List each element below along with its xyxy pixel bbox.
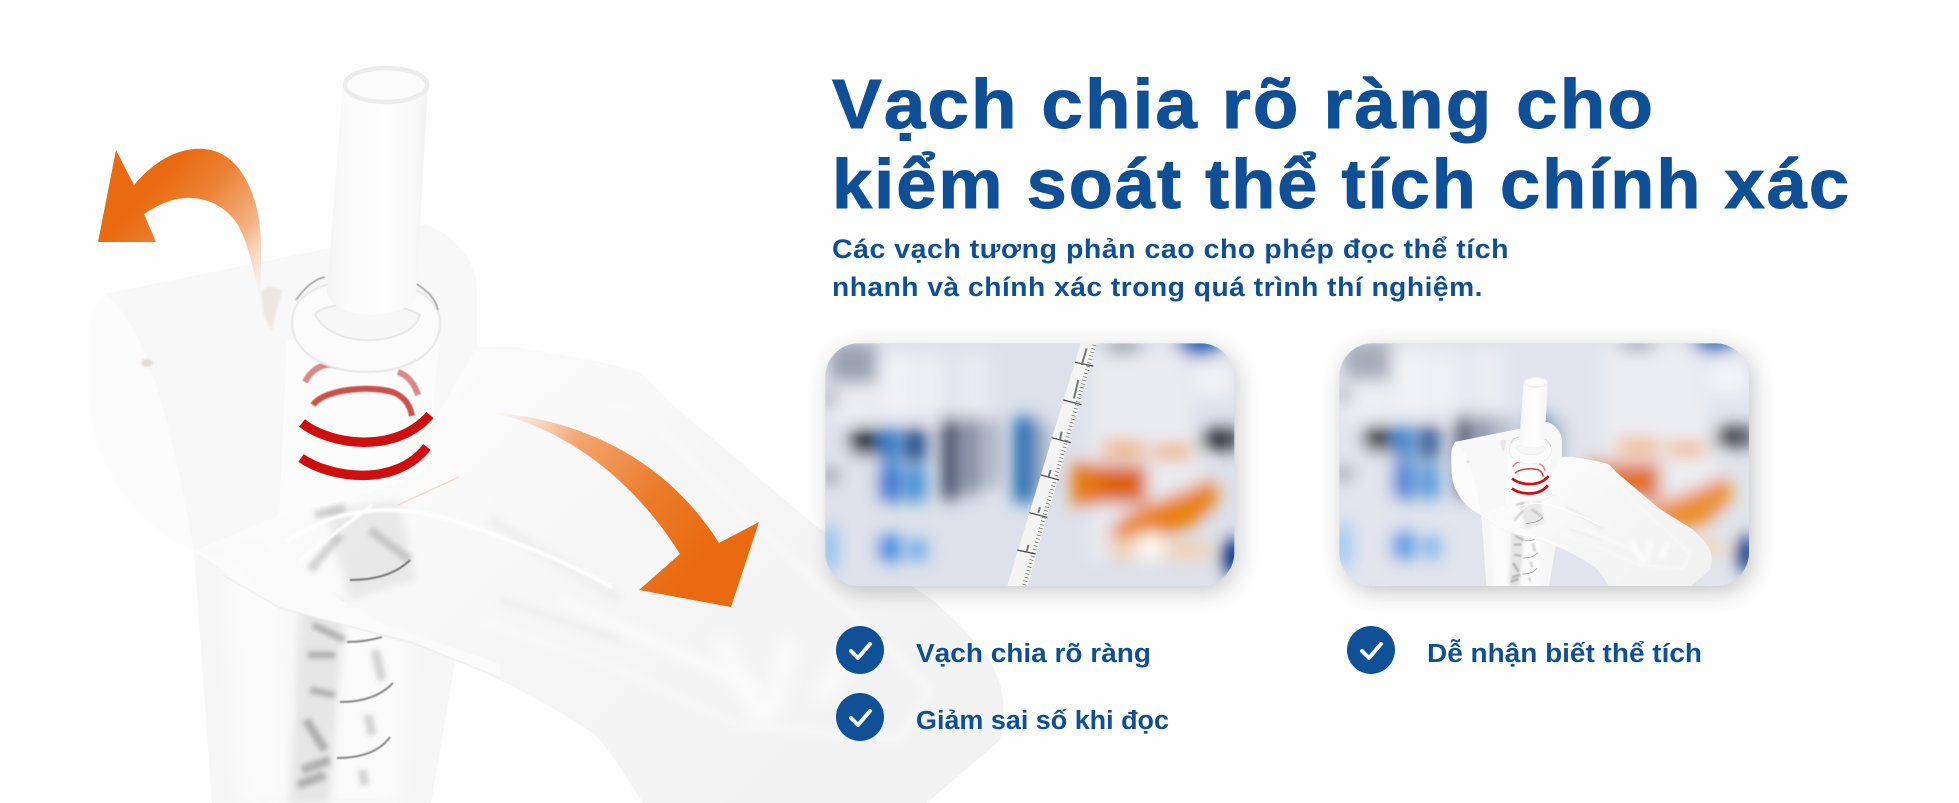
icon: check badge 3 xyxy=(1347,626,1395,674)
subtitle text: Các vạch tương phản cao cho phép đọc thể tích xyxy=(832,234,1509,264)
title: kiểm soát thể tích chính xác xyxy=(832,145,1851,223)
feature label 3: Dễ nhận biết thể tích xyxy=(1427,638,1702,668)
subtitle text: nhanh và chính xác trong quá trình thí nghiệm. xyxy=(832,272,1483,302)
feature label 2: Giảm sai số khi đọc xyxy=(916,707,1169,735)
arrow: curved right arrow xyxy=(490,412,759,607)
title: Vạch chia rõ ràng cho xyxy=(832,65,1655,143)
arrow: curved left arrow xyxy=(98,149,261,301)
panel: photo of tube with wrapper xyxy=(1331,329,1764,592)
icon: check badge 2 xyxy=(836,693,884,741)
title xyxy=(832,65,1851,223)
icon: check badge 1 xyxy=(836,626,884,674)
panel: photo of graduated pipette xyxy=(817,331,1250,593)
product: tube with wrapper xyxy=(89,68,1003,803)
subtitle text xyxy=(832,234,1509,302)
feature label 1: Vạch chia rõ ràng xyxy=(916,640,1151,668)
